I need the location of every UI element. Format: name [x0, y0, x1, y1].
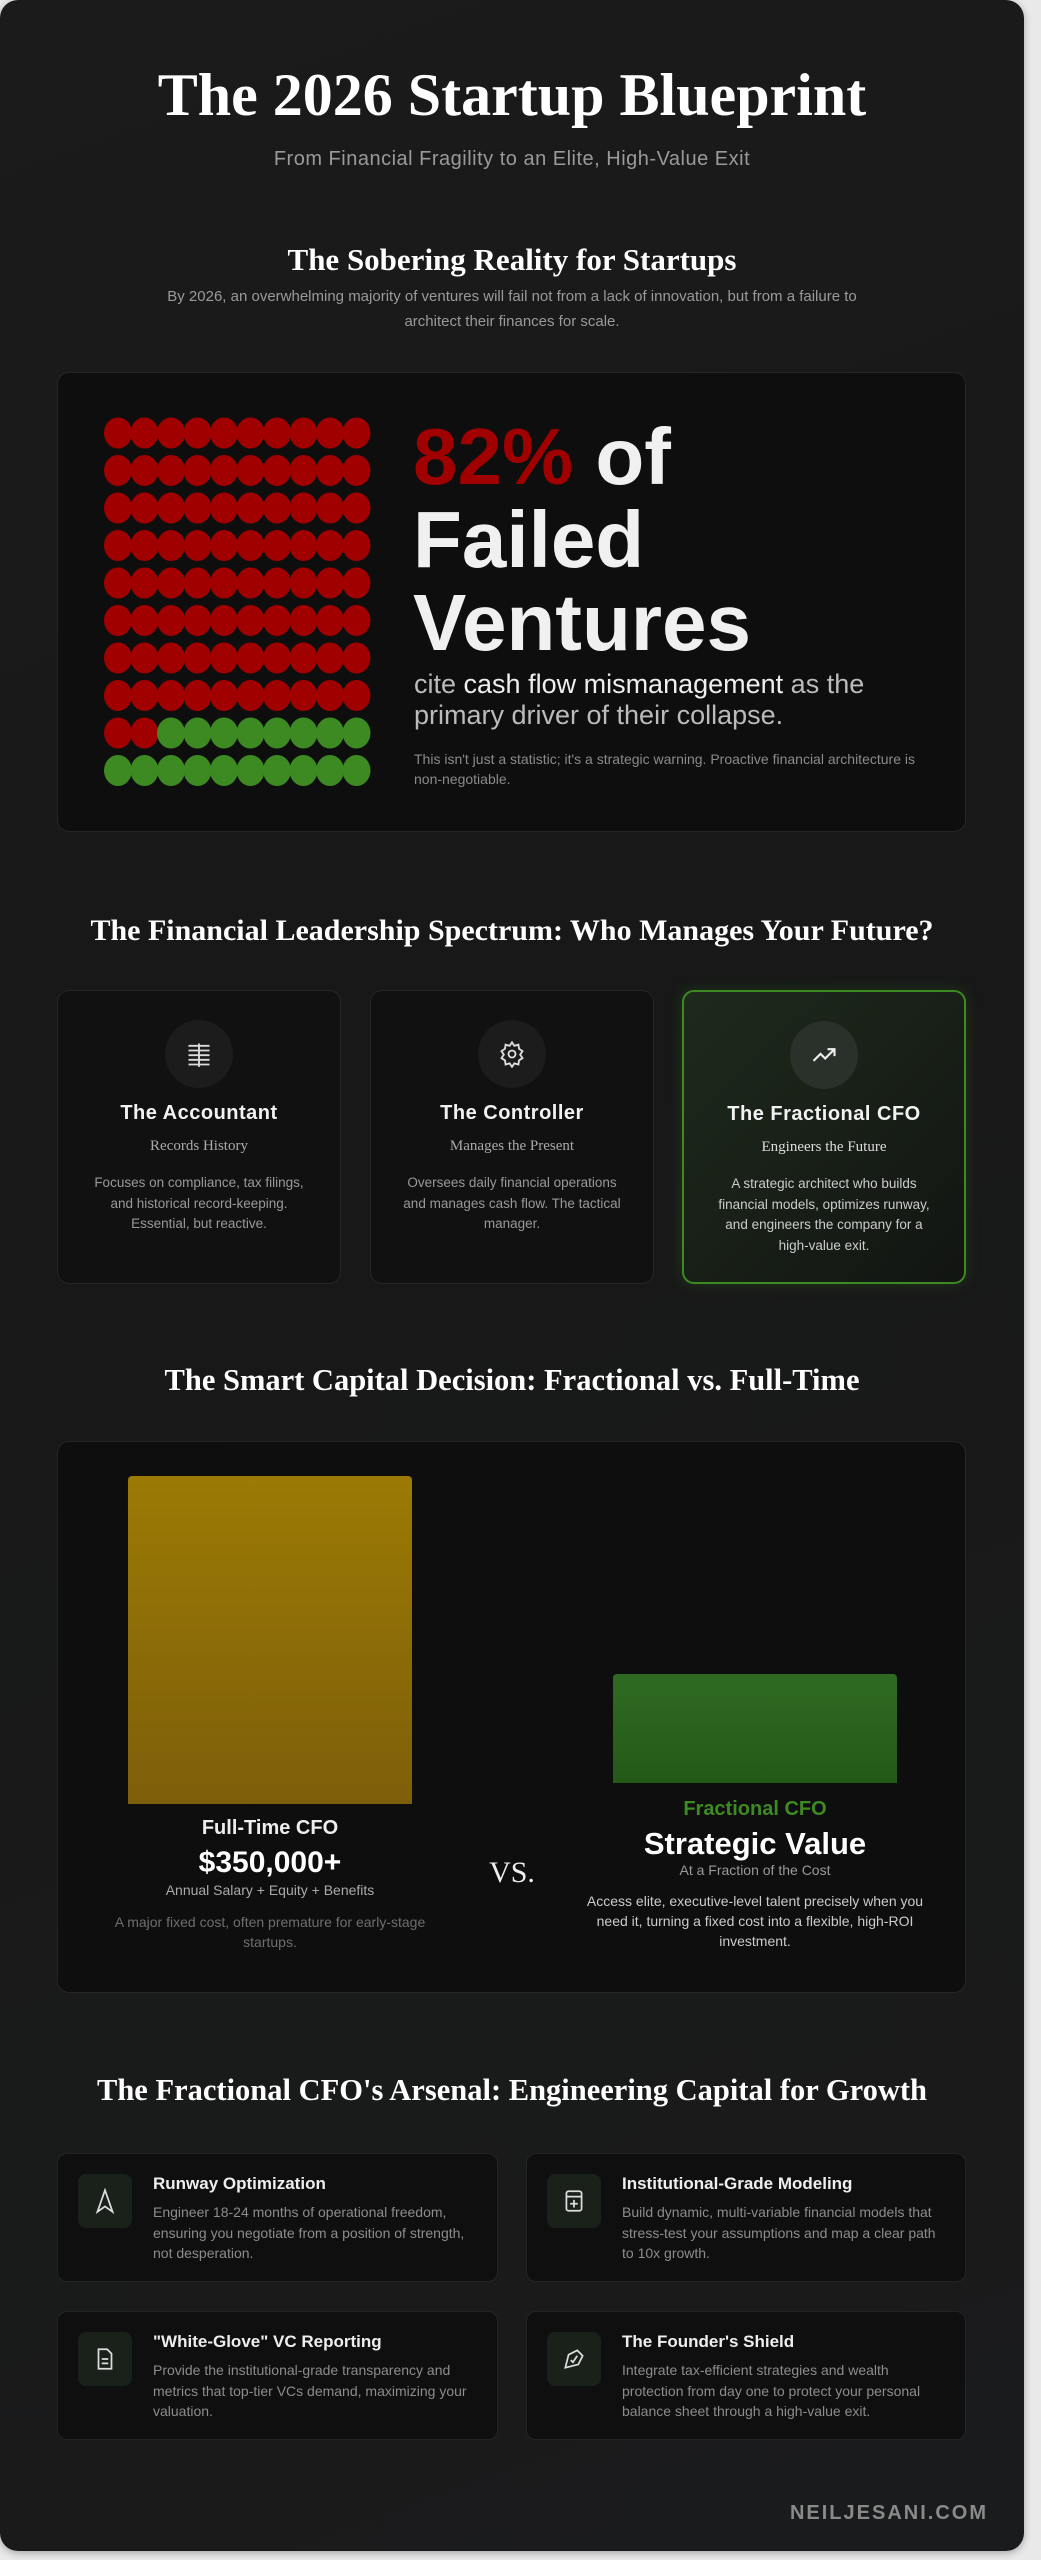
- card: fractional cfo: high-value exit.: [779, 1238, 869, 1252]
- card: vc reporting: [57, 2311, 498, 2440]
- card: controller: and manages cash flow. The tactical: [403, 1196, 621, 1210]
- text: full-time cfo: $350,000+: [199, 1846, 341, 1879]
- panel: comparison: [57, 1441, 966, 1993]
- text: sobering description: By 2026, an overwhelming majority of ventures will fail not from a lack of innovation, but from a failure to: [167, 288, 857, 305]
- footer brand: NEILJESANI.COM: [790, 2502, 988, 2524]
- text: full-time cfo: Full-Time CFO: [202, 1817, 338, 1839]
- card: fractional cfo: A strategic architect who builds: [731, 1176, 917, 1191]
- text: fractional cfo: Fractional CFO: [683, 1798, 827, 1820]
- text: sobering description: [167, 288, 857, 330]
- card: founder's shield: [526, 2311, 966, 2440]
- heading: arsenal: The Fractional CFO's Arsenal: Engineering Capital for Growth: [97, 2073, 927, 2107]
- stat description: cite cash flow mismanagement as the primary driver of their collapse.: [414, 669, 864, 730]
- card: modeling: [526, 2153, 966, 2282]
- text: full-time cfo: A major fixed cost, often premature for early-stage startups.: [115, 1914, 425, 1950]
- chart: dot grid 82 of 100: [104, 418, 370, 786]
- panel: statistic: [57, 372, 966, 832]
- text: full-time cfo: [114, 1817, 425, 1950]
- card: founder's shield: The Founder's Shield: [622, 2332, 794, 2351]
- card: accountant: [57, 990, 341, 1284]
- title: The 2026 Startup Blueprint: [158, 62, 866, 128]
- stat headline: 82% of: [413, 412, 671, 501]
- heading: smart capital: The Smart Capital Decision: Fractional vs. Full-Time: [165, 1363, 859, 1397]
- card: vc reporting: Provide the institutional-grade transparency and metrics that top-tier VCs demand, maximizing your valuation.: [153, 2362, 467, 2419]
- card: modeling: Build dynamic, multi-variable financial models that stress-test your assumptions and map a clear path to 10x growth.: [622, 2204, 936, 2261]
- card: runway optimization: Runway Optimization: [153, 2174, 326, 2193]
- card: controller: [370, 990, 654, 1284]
- stat note: This isn't just a statistic; it's a strategic warning. Proactive financial architecture is non-negotiable.: [414, 751, 915, 787]
- stat headline: Ventures: [413, 578, 751, 667]
- icon: shield: [547, 2332, 601, 2386]
- icon: ledger: [165, 1020, 233, 1088]
- card: vc reporting: "White-Glove" VC Reporting: [153, 2332, 382, 2351]
- card: fractional cfo: and engineers the company for a: [725, 1217, 923, 1232]
- text: sobering description: architect their finances for scale.: [404, 313, 620, 330]
- card: controller: Oversees daily financial operations: [407, 1175, 617, 1190]
- bar: full-time cfo: [128, 1476, 412, 1804]
- card: runway optimization: Engineer 18-24 months of operational freedom, ensuring you negotiate from a position of strength, not desperation.: [153, 2204, 464, 2261]
- heading: leadership spectrum: The Financial Leadership Spectrum: Who Manages Your Future?: [90, 914, 934, 947]
- icon: gear: [478, 1020, 546, 1088]
- card: controller: Manages the Present: [450, 1138, 574, 1154]
- card: founder's shield: Integrate tax-efficient strategies and wealth protection from day one to protect your personal balance sheet through a high-value exit.: [622, 2362, 920, 2419]
- card: fractional cfo: [682, 990, 966, 1284]
- card: controller: The Controller: [440, 1102, 584, 1124]
- icon: navigation: [78, 2174, 132, 2228]
- stat headline: [413, 412, 751, 667]
- text: fractional cfo: At a Fraction of the Cost: [680, 1862, 830, 1878]
- text: fractional cfo: Strategic Value: [644, 1826, 866, 1861]
- text: vs: VS.: [489, 1856, 535, 1889]
- icon: model: [547, 2174, 601, 2228]
- card: accountant: The Accountant: [120, 1102, 278, 1124]
- card: accountant: Records History: [150, 1138, 248, 1154]
- bar: fractional cfo: [613, 1674, 897, 1783]
- card: fractional cfo: financial models, optimizes runway,: [718, 1196, 930, 1212]
- card: accountant: and historical record-keeping.: [110, 1196, 288, 1210]
- icon: trend up: [790, 1021, 858, 1089]
- card: controller: manager.: [484, 1216, 540, 1231]
- card: fractional cfo: The Fractional CFO: [727, 1103, 921, 1125]
- text: fractional cfo: [586, 1798, 923, 1949]
- text: full-time cfo: Annual Salary + Equity + Benefits: [166, 1882, 374, 1898]
- icon: document: [78, 2332, 132, 2386]
- text: fractional cfo: Access elite, executive-level talent precisely when you need it, turning a fixed cost into a flexible, high-ROI investment.: [587, 1893, 923, 1949]
- heading: sobering reality: The Sobering Reality for Startups: [288, 242, 736, 277]
- card: accountant: Essential, but reactive.: [131, 1216, 267, 1231]
- stat headline: Failed: [413, 495, 644, 584]
- subtitle: From Financial Fragility to an Elite, High-Value Exit: [274, 148, 750, 170]
- card: accountant: Focuses on compliance, tax filings,: [94, 1175, 304, 1190]
- card: runway optimization: [57, 2153, 498, 2282]
- card: modeling: Institutional-Grade Modeling: [622, 2174, 852, 2193]
- card: fractional cfo: Engineers the Future: [762, 1139, 886, 1155]
